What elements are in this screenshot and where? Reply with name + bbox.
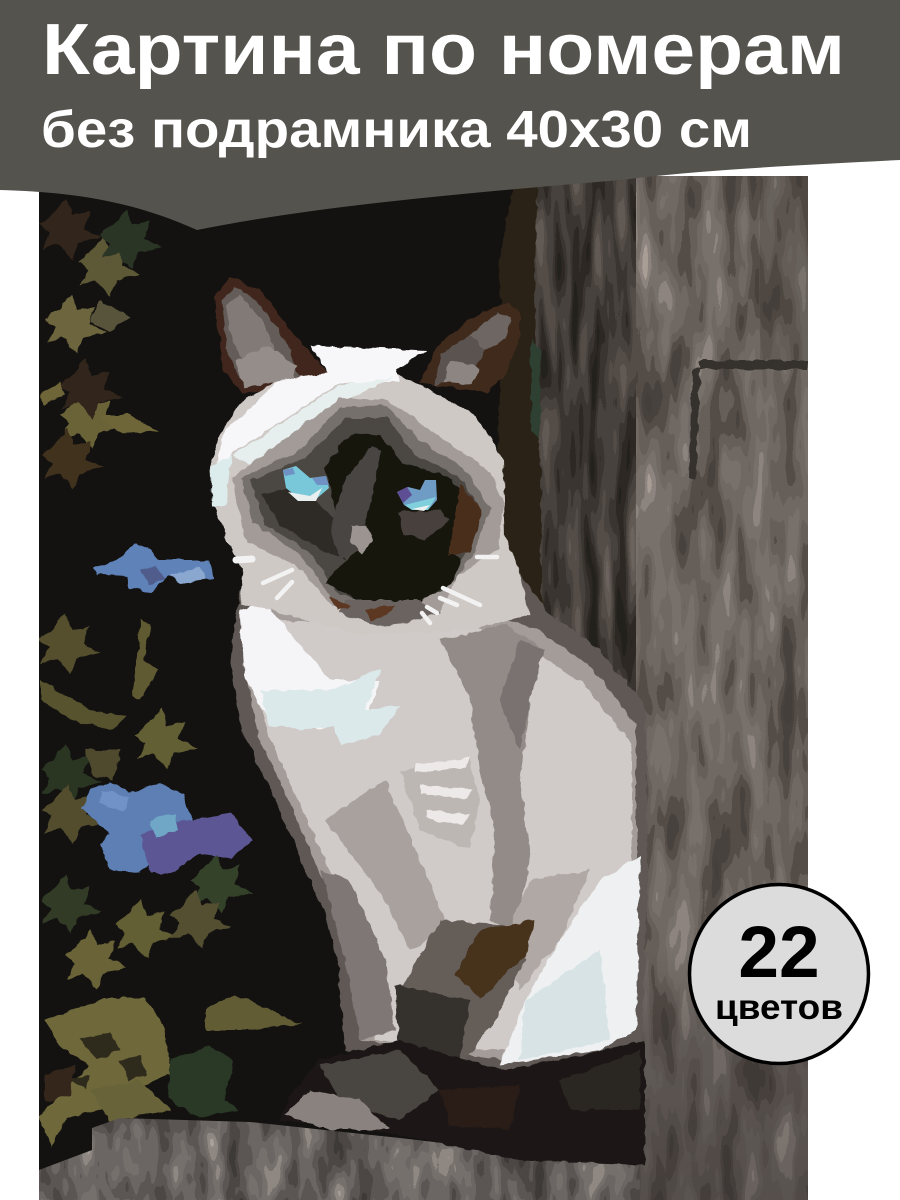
subtitle: без подрамника 40х30 см bbox=[41, 101, 752, 159]
painting bbox=[39, 176, 808, 1200]
badge: 22 colours: цветов bbox=[715, 988, 843, 1027]
badge: 22 colours bbox=[690, 884, 868, 1064]
panel: cat bbox=[210, 277, 648, 1165]
cat ears bbox=[215, 277, 520, 395]
icon: foliage bottom left bbox=[39, 854, 301, 1146]
cat paws and shadow bbox=[280, 1040, 645, 1165]
header banner bbox=[0, 0, 900, 230]
cat head bbox=[210, 345, 530, 635]
panel: stone ledge bbox=[39, 1110, 640, 1200]
panel: wooden post and wall bbox=[498, 176, 808, 1200]
icon: foliage middle left bbox=[39, 614, 197, 844]
cat eyes bbox=[283, 466, 437, 511]
cat body bbox=[230, 570, 648, 1080]
badge: 22 colours: 22 bbox=[738, 912, 820, 993]
title: Картина по номерам bbox=[42, 10, 845, 90]
icon: foliage top left bbox=[40, 199, 162, 489]
icon: blue and purple flower bottom bbox=[82, 782, 254, 873]
cat whiskers bbox=[236, 557, 497, 623]
icon: blue flower top bbox=[94, 542, 214, 592]
